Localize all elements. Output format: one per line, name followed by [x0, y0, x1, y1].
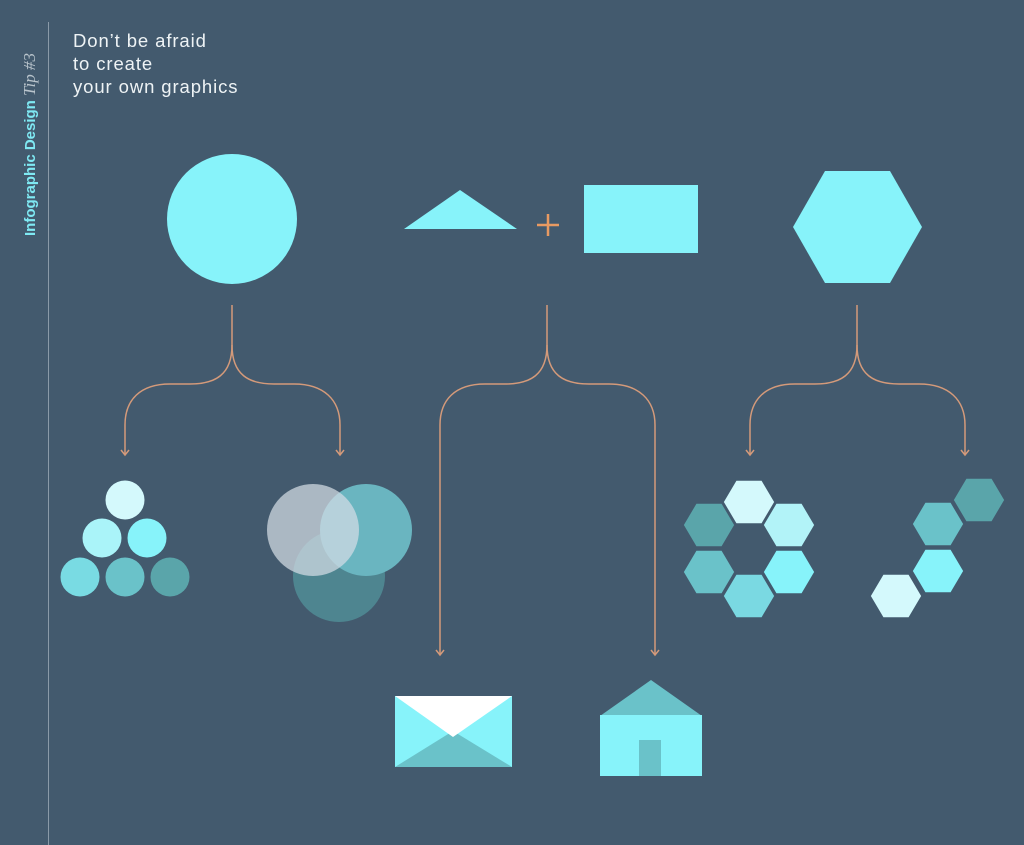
- arrows: hexagon branch: [746, 305, 969, 455]
- arrows: middle branch: [436, 305, 659, 655]
- heading: your own graphics: [73, 76, 238, 97]
- hexagon ring: [683, 480, 815, 618]
- circle pyramid: [60, 480, 190, 596]
- venn circles: [267, 484, 412, 622]
- shape: rectangle: [584, 185, 698, 253]
- plus sign: [537, 214, 559, 236]
- sidebar divider line: [48, 22, 49, 845]
- hexagon chain: [870, 478, 1005, 618]
- sidebar vertical title: Infographic Design Tip #3: [20, 53, 39, 236]
- heading: [73, 30, 238, 97]
- heading: to create: [73, 53, 153, 74]
- arrows: circle branch: [121, 305, 344, 455]
- icon: envelope: [395, 696, 512, 767]
- shape: circle: [167, 154, 297, 284]
- shape: triangle: [404, 190, 517, 229]
- shape: hexagon: [793, 171, 922, 283]
- icon: house: [600, 680, 702, 776]
- heading: Don’t be afraid: [73, 30, 207, 51]
